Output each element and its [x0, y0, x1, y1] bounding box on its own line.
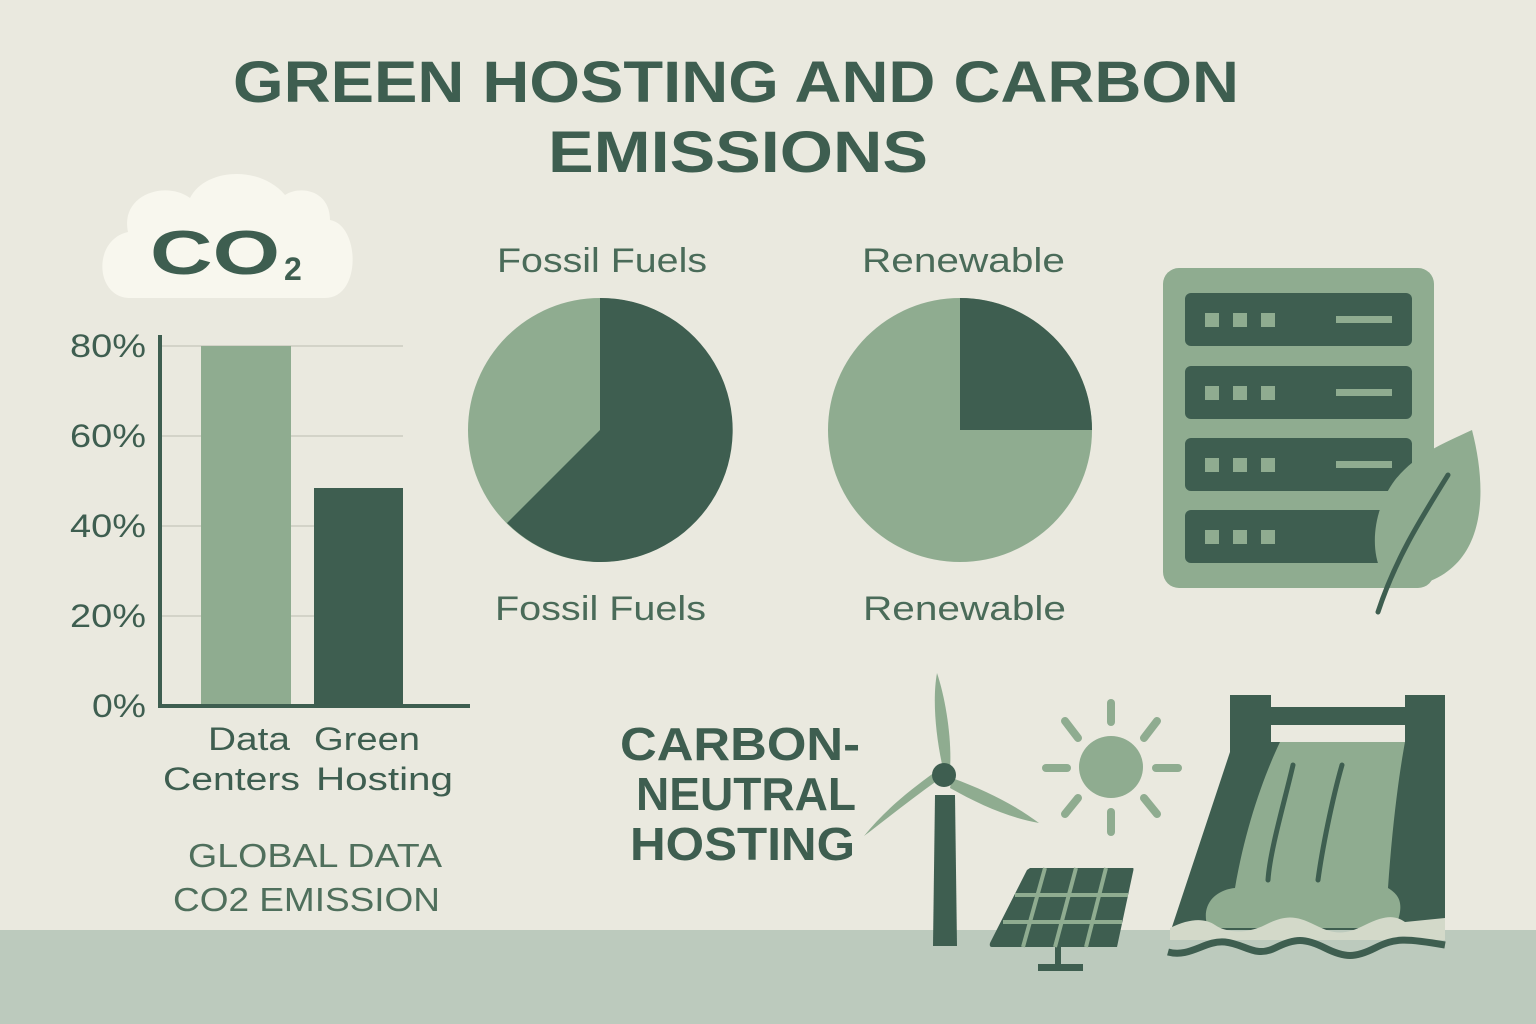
pie chart: fossil fuels: [468, 242, 733, 628]
icon: hydro dam: [1168, 695, 1445, 956]
title: GREEN HOSTING AND CARBON: [233, 50, 1239, 115]
icon: CO2 cloud: CO: [150, 219, 280, 288]
bar chart: global data CO2 emission: 80%: [70, 328, 146, 364]
bar chart: global data CO2 emission: 40%: [70, 508, 146, 544]
pie chart: fossil fuels: Fossil Fuels: [497, 242, 707, 280]
bar chart: global data CO2 emission: 20%: [70, 598, 146, 634]
pie chart: renewable: [828, 242, 1092, 628]
icon: sun: [1046, 703, 1178, 832]
ground band: [0, 930, 1536, 1024]
bar chart: global data CO2 emission: Data: [208, 721, 290, 757]
title: EMISSIONS: [548, 120, 928, 185]
bar chart: global data CO2 emission: GLOBAL DATA: [188, 837, 442, 874]
bar chart: global data CO2 emission: 60%: [70, 418, 146, 454]
bar chart: global data CO2 emission: Centers: [163, 761, 300, 797]
icon: wind turbine: [864, 673, 1039, 946]
bar chart: global data CO2 emission: [70, 328, 470, 918]
icon: CO2 cloud: 2: [284, 251, 302, 287]
text: carbon-neutral hosting: CARBON-: [620, 718, 860, 770]
bar chart: global data CO2 emission: Green: [314, 721, 420, 757]
icon: CO2 cloud: [102, 174, 353, 298]
bar chart: global data CO2 emission: CO2 EMISSION: [173, 881, 440, 918]
bar chart: global data CO2 emission: 0%: [92, 688, 146, 724]
icon: server with leaf: [1163, 268, 1480, 612]
text: carbon-neutral hosting: HOSTING: [630, 818, 855, 870]
pie chart: renewable: Renewable: [863, 590, 1066, 628]
title: [233, 50, 1239, 185]
bar chart: global data CO2 emission: Hosting: [316, 761, 453, 797]
pie chart: fossil fuels: Fossil Fuels: [495, 590, 706, 628]
pie chart: renewable: Renewable: [862, 242, 1065, 280]
text: carbon-neutral hosting: NEUTRAL: [636, 768, 856, 820]
icon: solar panel: [990, 868, 1134, 971]
text: carbon-neutral hosting: [620, 718, 860, 870]
